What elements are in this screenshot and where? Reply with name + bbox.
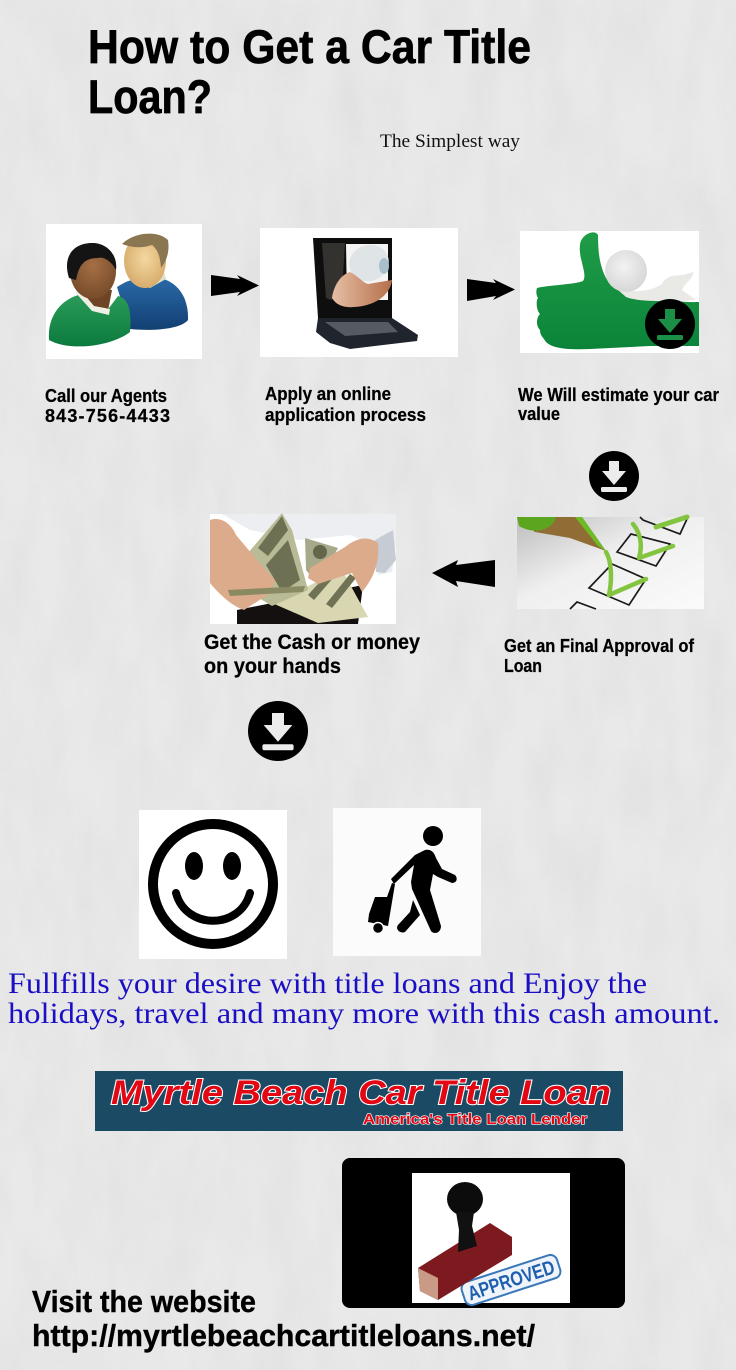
promo text: Fullfills your desire with title loans and Enjoy the bbox=[8, 967, 647, 1000]
arrow 1 bbox=[211, 275, 259, 296]
website call to action: Visit the website bbox=[32, 1284, 256, 1319]
icon: smiley bbox=[139, 810, 287, 959]
logo banner bbox=[95, 1071, 623, 1131]
title: Loan? bbox=[88, 70, 212, 123]
step 2 caption: application process bbox=[265, 404, 426, 425]
website call to action bbox=[32, 1284, 535, 1353]
step 5: checklist image bbox=[517, 517, 704, 609]
subtitle: The Simplest way bbox=[380, 131, 521, 152]
arrow 3 bbox=[432, 560, 495, 587]
step 4: cash image bbox=[210, 513, 396, 624]
download icon on step 3 bbox=[645, 299, 695, 349]
title bbox=[88, 20, 531, 123]
step 2 caption bbox=[265, 383, 426, 425]
step 3 caption: We Will estimate your car bbox=[518, 384, 719, 405]
download icon after step 4 bbox=[248, 701, 308, 761]
approved stamp panel bbox=[342, 1158, 625, 1308]
stamp word: APPROVED bbox=[465, 1257, 558, 1305]
step 3 caption bbox=[518, 384, 719, 424]
title: How to Get a Car Title bbox=[88, 20, 531, 73]
step 1 caption: Call our Agents bbox=[45, 385, 167, 406]
step 4 caption: on your hands bbox=[204, 654, 341, 678]
logo title: Myrtle Beach Car Title Loan bbox=[111, 1074, 611, 1112]
icon: traveler bbox=[333, 808, 481, 956]
step 5 caption: Get an Final Approval of bbox=[504, 635, 695, 656]
website call to action: http://myrtlebeachcartitleloans.net/ bbox=[32, 1318, 535, 1353]
logo banner: America's Title Loan Lender bbox=[363, 1111, 587, 1128]
promo text: holidays, travel and many more with this cash amount. bbox=[8, 997, 720, 1030]
step 2: laptop image bbox=[260, 228, 458, 357]
step 2 caption: Apply an online bbox=[265, 383, 391, 404]
step 4 caption: Get the Cash or money bbox=[204, 630, 420, 654]
step 3: thumbs-up image bbox=[520, 231, 699, 353]
step 5 caption bbox=[504, 635, 695, 676]
step 4 caption bbox=[204, 630, 420, 678]
promo text bbox=[8, 967, 720, 1030]
step 3 caption: value bbox=[518, 403, 560, 424]
step 5 caption: Loan bbox=[504, 655, 542, 676]
download icon after step 3 bbox=[589, 451, 639, 501]
step 1 caption: 843-756-4433 bbox=[45, 406, 170, 426]
arrow 2 bbox=[467, 279, 515, 301]
step 1: agents image bbox=[46, 224, 202, 359]
step 1 caption bbox=[45, 385, 170, 426]
